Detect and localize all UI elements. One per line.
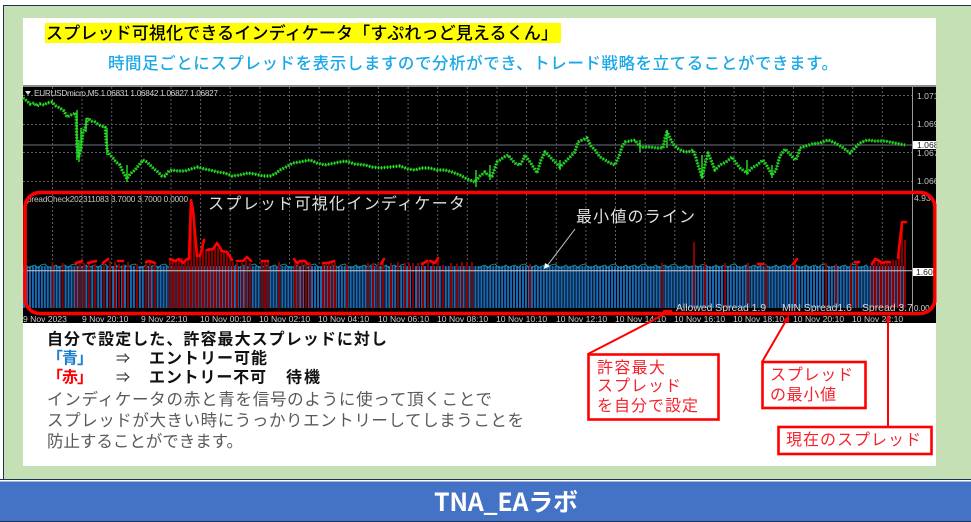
callout: minimum spread — [762, 315, 866, 408]
price axis labels: 1.066 — [917, 176, 939, 186]
time axis labels: 10 Nov 10:10 — [496, 314, 547, 324]
callout: allowed max spread: スプレッド — [597, 372, 681, 396]
footer band: TNA_EAラボ — [434, 483, 578, 519]
time axis labels: 10 Nov 00:10 — [200, 314, 251, 324]
price axis labels: 1.068 — [917, 140, 939, 150]
subtitle: 時間足ごとにスプレッドを表示しますので分析ができ、トレード戦略を立てることができます。 — [108, 50, 838, 74]
indicator header text: preadCheck202311083 3.7000 3.7000 0.0000 — [27, 195, 188, 204]
callout: allowed max spread: 許容最大 — [597, 354, 665, 378]
title: スプレッド可視化できるインディケータ「すぷれっど見えるくん」 — [46, 19, 558, 44]
time axis labels — [23, 314, 903, 324]
spread readout text: MIN Spread1.6 — [782, 303, 852, 314]
spread indicator histogram — [23, 200, 912, 308]
price axis labels: 1.071 — [917, 91, 939, 101]
explanation: heading: 自分で設定した、許容最大スプレッドに対し — [47, 326, 387, 350]
price axis labels: 1.067 — [917, 148, 939, 158]
explanation: red rule: エントリー不可 — [149, 364, 266, 388]
explanation: red rule — [47, 364, 320, 388]
red rounded highlight around indicator — [25, 192, 935, 314]
price axis labels — [913, 91, 939, 203]
callout: minimum spread: スプレッド — [770, 361, 853, 385]
indicator annotation: スプレッド可視化インディケータ — [208, 190, 465, 214]
time axis labels: 10 Nov 02:10 — [259, 314, 310, 324]
time axis labels: 9 Nov 2023 — [23, 314, 67, 324]
price axis labels: 1.069 — [917, 119, 939, 129]
price axis labels: 4.93 — [914, 193, 931, 203]
time axis labels: 10 Nov 04:10 — [318, 314, 369, 324]
time axis labels: 10 Nov 22:10 — [852, 314, 903, 324]
callout: allowed max spread — [588, 311, 718, 420]
spread readout text: 0.00 — [914, 304, 930, 313]
chart header text: EURUSDmicro,M5 1.06831 1.06842 1.06827 1.06827 — [34, 89, 218, 98]
price series — [23, 98, 905, 187]
explanation: red rule: 待機 — [286, 364, 320, 388]
explanation: red rule: 「赤」 — [47, 364, 93, 388]
time axis labels: 10 Nov 06:10 — [378, 314, 429, 324]
explanation: blue rule — [47, 344, 267, 368]
explanation: blue rule: ⇒ — [116, 348, 130, 368]
minimum value axis label: 1.600 — [916, 267, 938, 277]
time axis labels: 10 Nov 14:10 — [615, 314, 666, 324]
explanation: blue rule: エントリー可能 — [149, 344, 267, 368]
time axis labels: 10 Nov 20:10 — [793, 314, 844, 324]
time axis labels: 10 Nov 12:10 — [556, 314, 607, 324]
spread readout text: Spread 3.7 — [862, 303, 913, 314]
explanation: blue rule: 「青」 — [47, 344, 93, 368]
callout: minimum spread: の最小値 — [770, 381, 836, 405]
explanation: body text: スプレッドが大きい時にうっかりエントリーしてしまうことを — [47, 407, 524, 431]
explanation: body text — [47, 386, 524, 452]
time axis labels: 9 Nov 22:10 — [141, 314, 188, 324]
time axis labels: 9 Nov 20:10 — [82, 314, 129, 324]
explanation: red rule: ⇒ — [116, 368, 130, 388]
spread readout text — [676, 303, 930, 314]
green margin covering clipped axis labels — [936, 86, 971, 323]
time axis labels: 10 Nov 08:10 — [437, 314, 488, 324]
callout: allowed max spread: を自分で設定 — [597, 392, 698, 416]
panel: MT4 chart — [23, 85, 939, 324]
explanation: body text: インディケータの赤と青を信号のように使って頂くことで — [47, 386, 492, 410]
explanation: body text: 防止することができます。 — [47, 428, 243, 452]
time axis labels: 10 Nov 18:10 — [733, 314, 784, 324]
spread readout text: Allowed Spread 1.9 — [676, 303, 766, 314]
minimum line annotation: 最小値のライン — [576, 203, 695, 227]
footer band — [0, 479, 971, 522]
callout: current spread: 現在のスプレッド — [786, 426, 921, 450]
callout: current spread — [778, 315, 932, 454]
arrow: minimum line — [544, 229, 575, 269]
time axis labels: 10 Nov 16:10 — [674, 314, 725, 324]
